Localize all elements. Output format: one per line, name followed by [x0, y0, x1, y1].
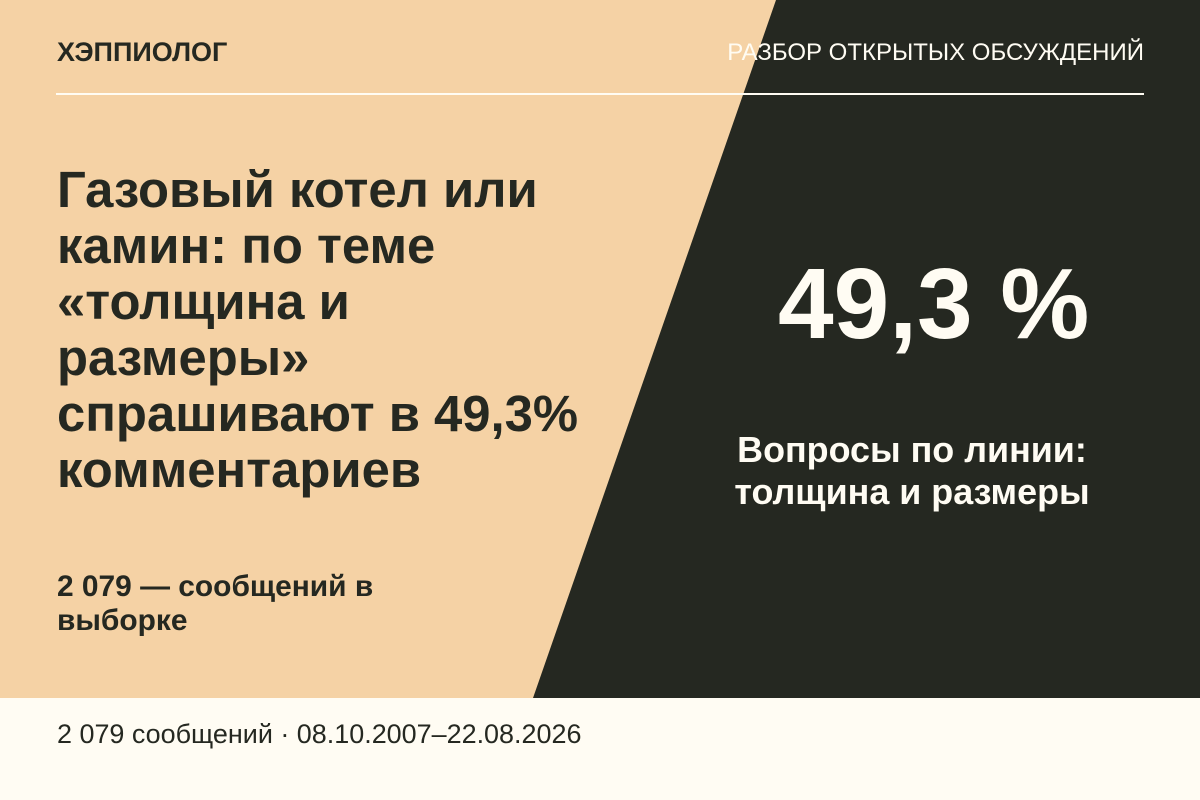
- header label: РАЗБОР ОТКРЫТЫХ ОБСУЖДЕНИЙ: [727, 39, 1144, 66]
- percentage caption: толщина и размеры: [734, 472, 1090, 512]
- big percentage: 49,3 %: [778, 248, 1089, 360]
- header rule: [56, 93, 1144, 95]
- sample size note: выборке: [57, 604, 187, 637]
- brand name: ХЭППИОЛОГ: [57, 37, 227, 67]
- main heading: комментариев: [57, 441, 421, 498]
- footer text: 2 079 сообщений · 08.10.2007–22.08.2026: [57, 719, 581, 749]
- main heading: Газовый котел или: [57, 161, 538, 218]
- percentage caption: [734, 430, 1090, 512]
- main heading: размеры»: [57, 329, 309, 386]
- main heading: спрашивают в 49,3%: [57, 385, 578, 442]
- main heading: «толщина и: [57, 273, 350, 330]
- main heading: камин: по теме: [57, 217, 435, 274]
- percentage caption: Вопросы по линии:: [737, 430, 1087, 470]
- sample size note: [57, 570, 373, 637]
- sample size note: 2 079 — сообщений в: [57, 570, 373, 603]
- main heading: [57, 161, 578, 498]
